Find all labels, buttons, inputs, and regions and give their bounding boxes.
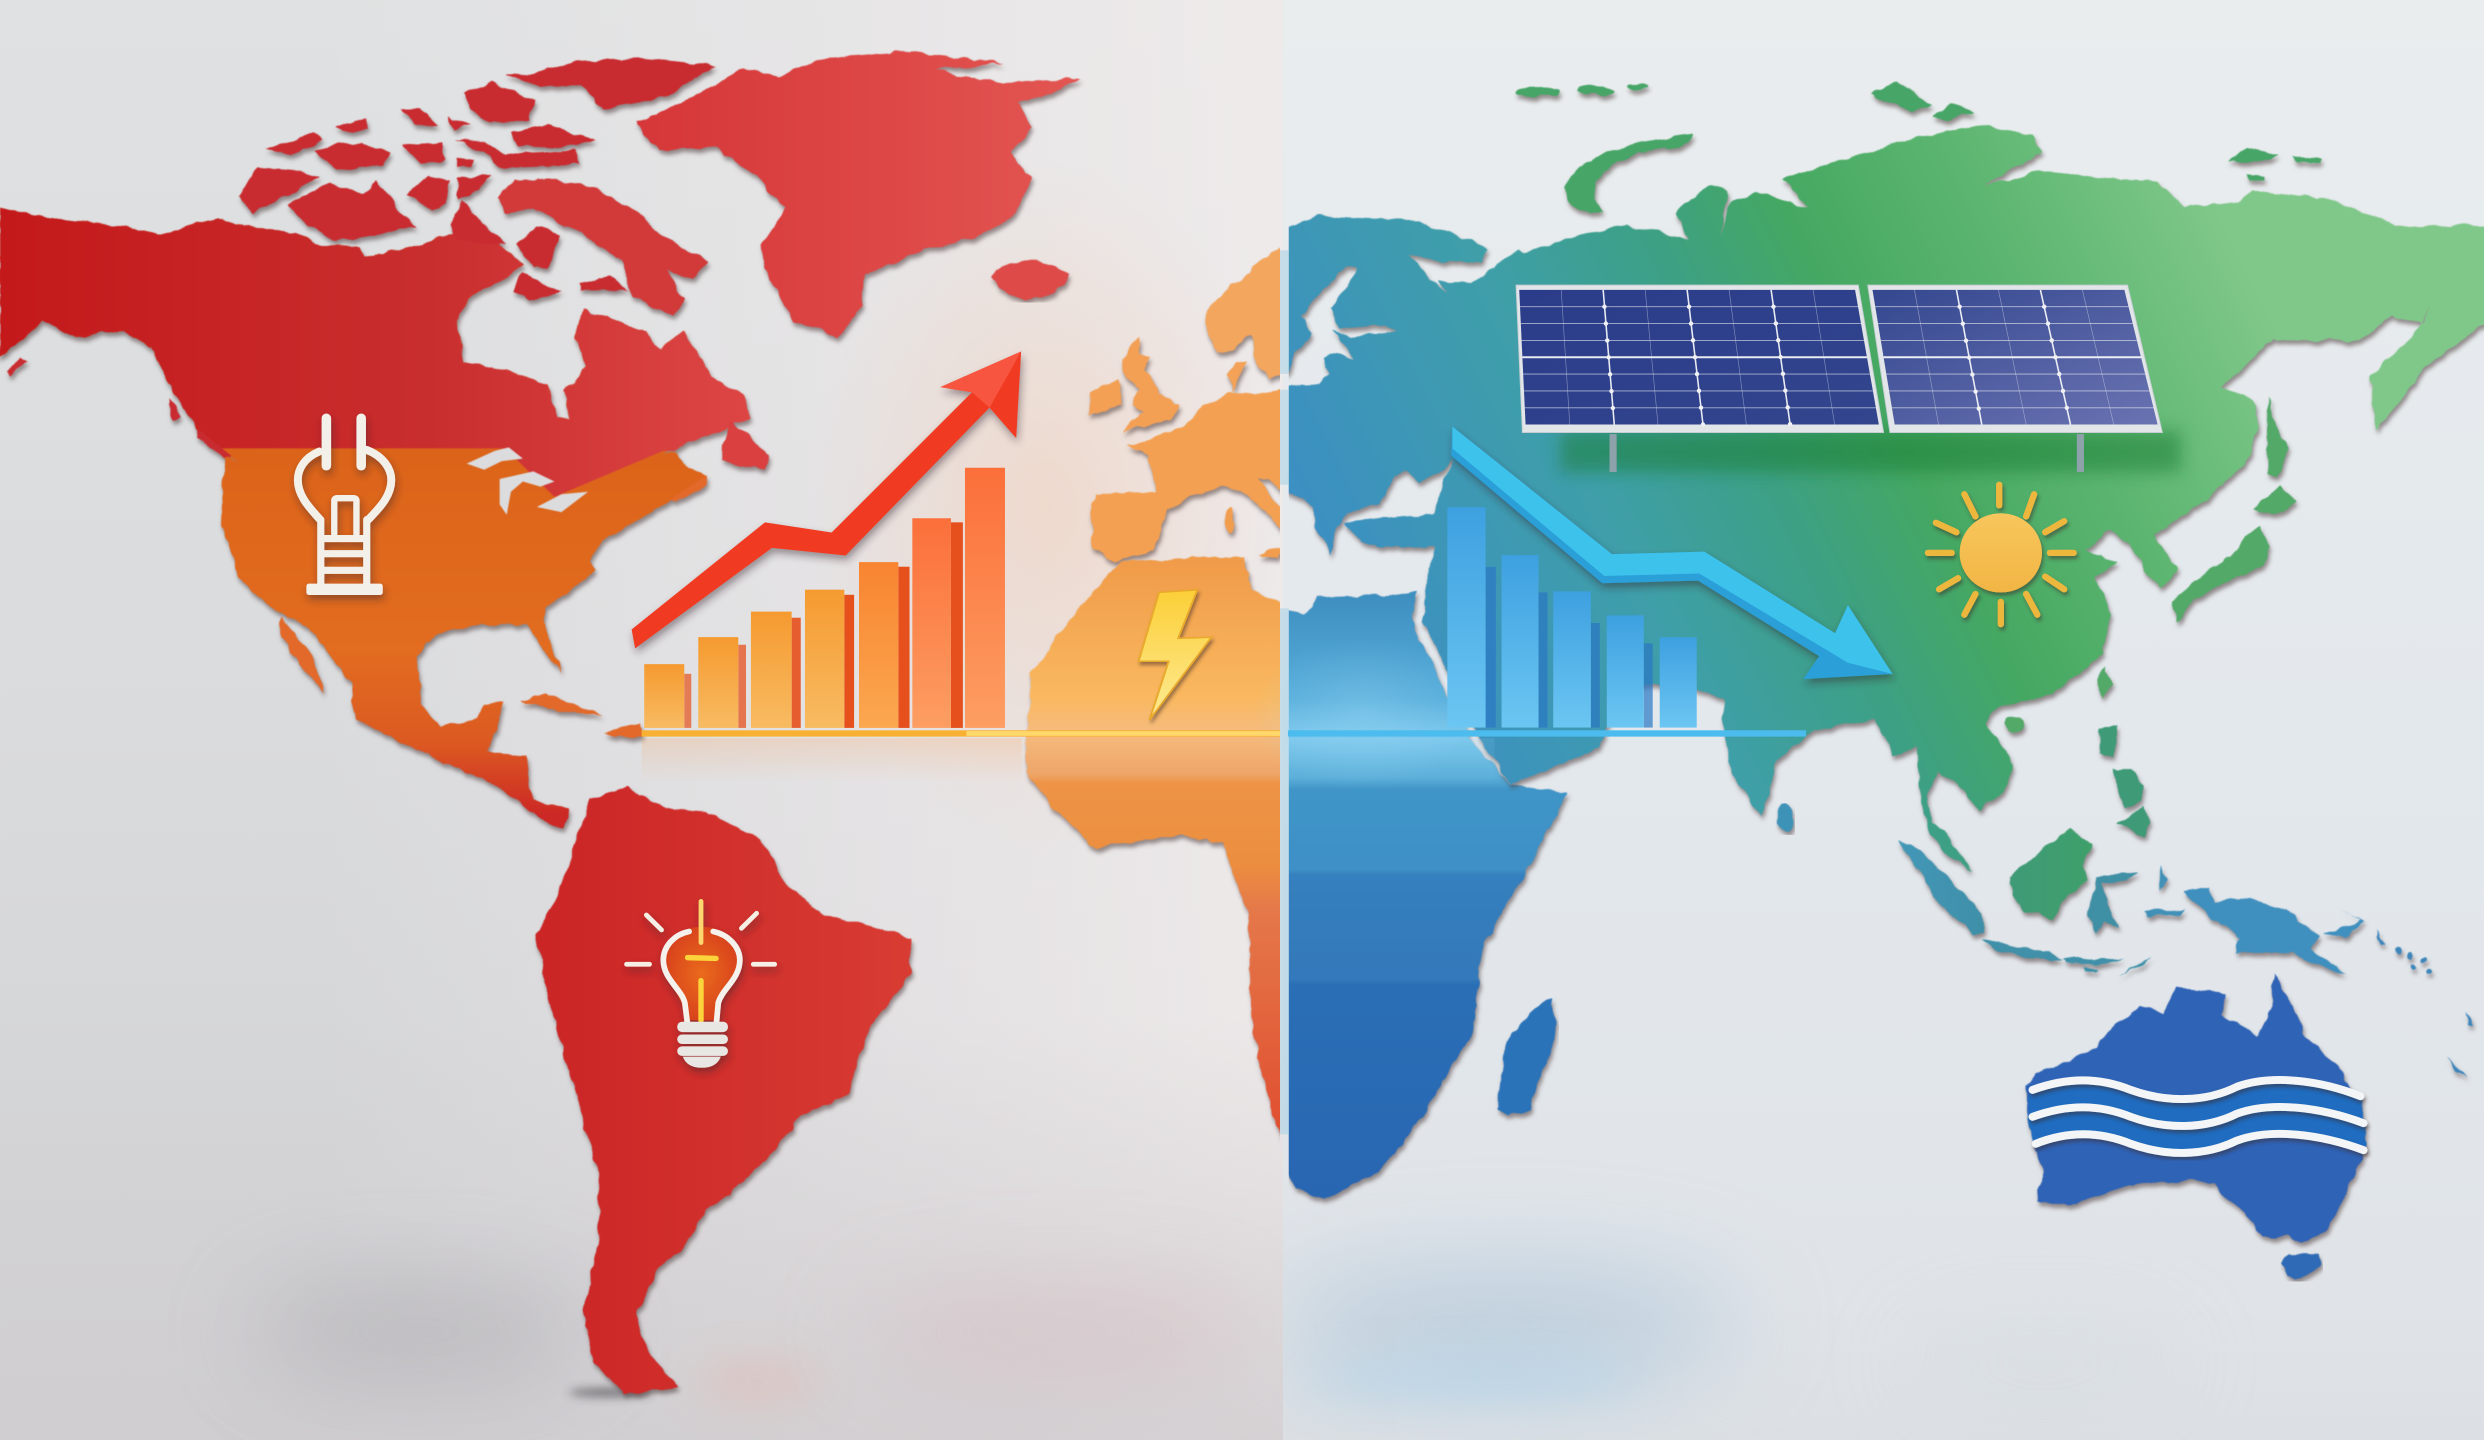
map: Australia	[2026, 973, 2365, 1244]
Borneo	[2009, 828, 2092, 918]
Java and lesser islands	[1981, 939, 2153, 976]
icon: light bulb	[627, 901, 775, 1068]
bar chart: rising orange bars	[644, 468, 1005, 728]
bar 2	[1502, 555, 1539, 728]
bar 1	[1447, 507, 1486, 728]
bulb rays	[627, 901, 775, 964]
islands: Arctic Russia	[1514, 82, 2322, 214]
map: Tasmania	[2282, 1253, 2321, 1280]
floor shadows left	[246, 1286, 1267, 1397]
Australia darker wave bands	[2029, 1083, 2365, 1129]
Corsica and Sardinia	[1226, 508, 1234, 532]
map: South East Asia and Oceania islands	[1898, 727, 2474, 1077]
bar 4	[1607, 615, 1644, 728]
central blue glow	[1252, 637, 1473, 789]
bar 3	[751, 612, 792, 728]
lakes	[467, 447, 588, 515]
baseline glow right	[1289, 738, 1495, 786]
Great Britain	[1122, 337, 1178, 432]
map: Eurasia	[1275, 125, 2484, 873]
arrow: rising red	[632, 351, 1021, 648]
Denmark	[1228, 362, 1247, 393]
left solar panel	[1516, 285, 1884, 432]
bar side shading	[1486, 567, 1653, 728]
panel legs	[1610, 434, 2084, 472]
bar 6	[912, 518, 951, 728]
bulb base	[677, 1022, 728, 1068]
mainland Europe	[1092, 387, 1290, 562]
panel: left background	[0, 0, 1283, 1440]
New Guinea	[2184, 888, 2347, 974]
icon: sun	[1928, 485, 2074, 624]
central glow	[808, 158, 1283, 855]
ladder base	[307, 585, 382, 594]
islands: Caribbean, Baja and Nova Scotia	[281, 474, 709, 737]
floor shadows right	[1284, 1230, 1740, 1427]
icon: plug tower	[298, 418, 391, 594]
bar side shading	[684, 522, 963, 728]
islands: Arctic archipelago	[7, 58, 768, 469]
filament	[688, 958, 716, 1020]
ladder	[321, 520, 367, 585]
baseline glow left	[642, 738, 1022, 783]
map: Iceland	[990, 260, 1070, 300]
Ireland	[1090, 380, 1122, 415]
bar 1	[644, 664, 684, 728]
island: Sri Lanka	[1777, 805, 1794, 833]
Sumatra	[1898, 840, 1985, 934]
map: Africa east (blue)	[1275, 591, 1567, 1201]
map: South America	[535, 787, 911, 1394]
icon: solar panels	[1516, 285, 2162, 472]
icon: water waves	[2032, 1080, 2364, 1153]
Scandinavia west	[1207, 240, 1290, 378]
islands: Japan, Sakhalin, Taiwan	[2006, 398, 2297, 732]
plug prongs	[326, 418, 361, 466]
bar chart: falling blue bars	[1447, 507, 1697, 728]
map: North America	[0, 58, 768, 830]
New Britain	[2323, 907, 2362, 937]
region: USA and Mexico orange	[0, 208, 751, 830]
right solar panel	[1868, 285, 2162, 432]
baseline: orange	[642, 730, 1280, 737]
icon: lightning bolt	[1139, 590, 1211, 720]
bar 5	[859, 562, 898, 728]
seam tint over the map	[1280, 250, 1289, 1134]
bulb outline	[663, 931, 740, 1022]
Moluccas	[2144, 865, 2184, 916]
bar 2	[698, 637, 738, 728]
bar 5	[1660, 637, 1697, 728]
bulb glow fill	[664, 927, 740, 1020]
map: Madagascar	[1497, 998, 1556, 1117]
bar 4	[805, 590, 844, 728]
panel: right background	[1283, 0, 2484, 1440]
plug ring	[298, 450, 391, 520]
solar panel shadow	[1560, 431, 2181, 472]
Philippines	[2101, 727, 2151, 838]
bar 3	[1553, 591, 1591, 728]
map: Africa west (orange)	[1025, 556, 1293, 1172]
Sulawesi	[2088, 872, 2138, 934]
Pacific dots	[2376, 930, 2474, 1077]
arrow: falling blue	[1451, 427, 1893, 679]
baseline: blue	[1288, 730, 1806, 737]
map: Europe west (orange)	[1090, 240, 1290, 562]
Sicily	[1258, 547, 1280, 564]
map: Greenland	[635, 51, 1081, 336]
inner stem	[334, 498, 356, 534]
region: Canada and Alaska red	[0, 207, 751, 497]
sun rays	[1928, 485, 2074, 624]
bar 7	[965, 468, 1005, 728]
